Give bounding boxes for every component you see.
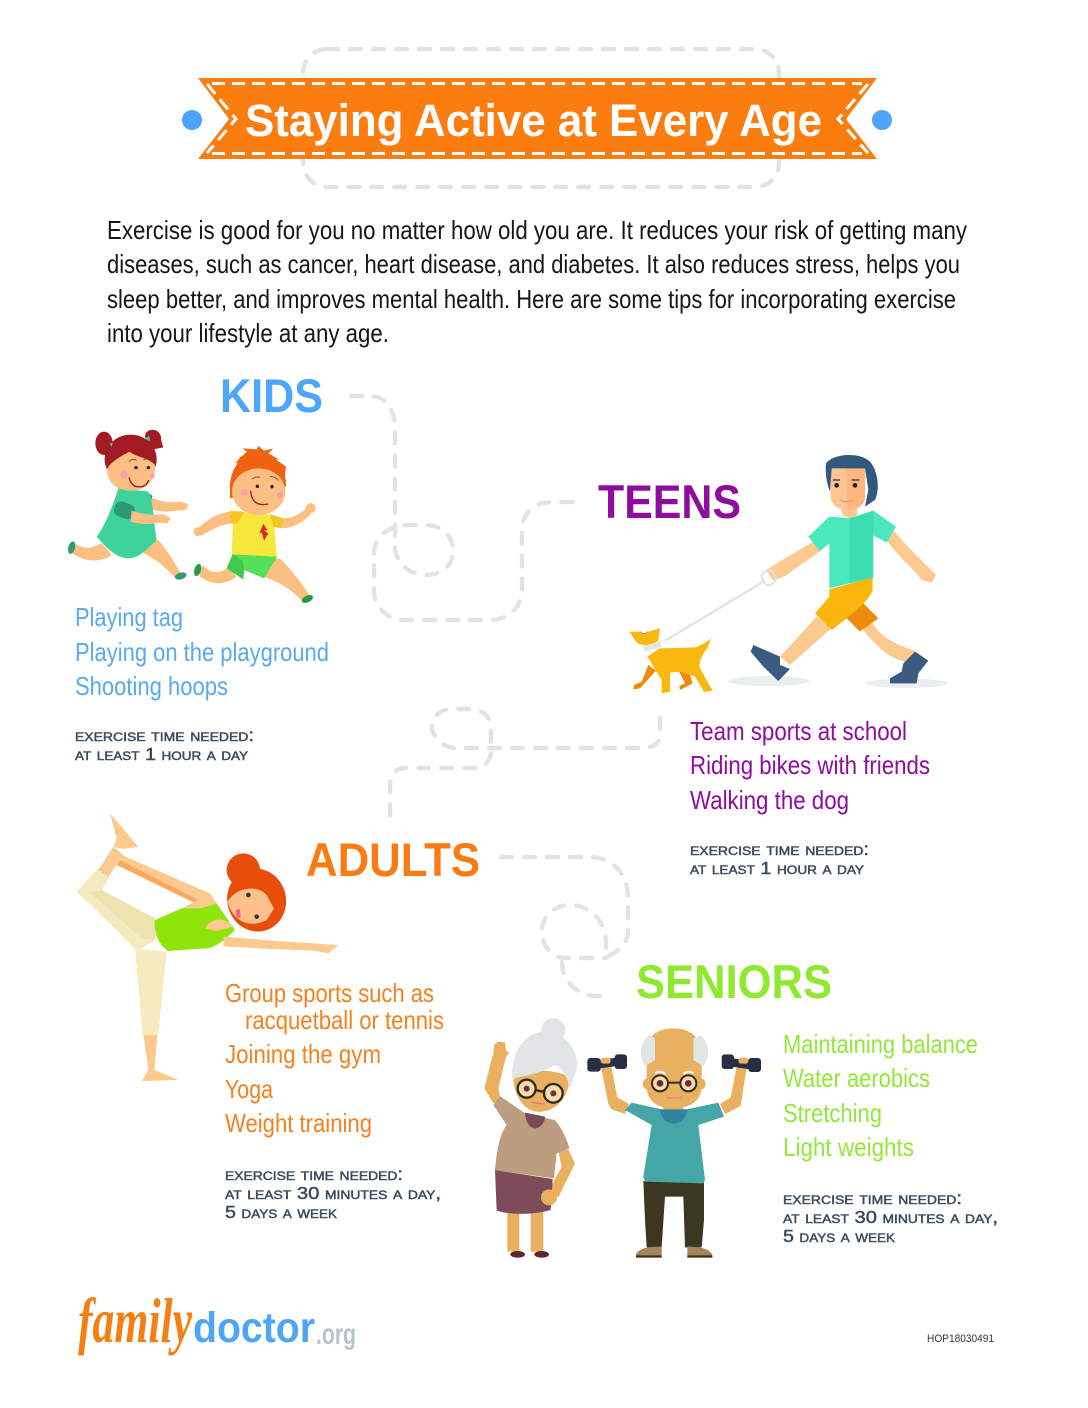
teens activities xyxy=(690,716,930,815)
logo: familydoctor.org: .org xyxy=(316,1318,356,1351)
senior man xyxy=(587,1028,761,1258)
illustration: running kids xyxy=(67,430,316,605)
teens activities: Walking the dog xyxy=(690,785,849,815)
teens activities: Riding bikes with friends xyxy=(690,750,930,780)
senior woman xyxy=(484,1018,577,1258)
intro paragraph xyxy=(107,215,967,348)
adults exercise time: 5 days a week xyxy=(225,1202,337,1222)
illustration: senior couple exercising xyxy=(484,1018,761,1258)
illustration: teen walking dog xyxy=(629,455,948,693)
kids activities: Shooting hoops xyxy=(75,671,228,701)
intro paragraph: into your lifestyle at any age. xyxy=(107,318,389,348)
intro paragraph: sleep better, and improves mental health. Here are some tips for incorporating exercise xyxy=(107,284,956,314)
adults activities xyxy=(225,978,444,1138)
teens activities: Team sports at school xyxy=(690,716,907,746)
seniors heading: SENIORS xyxy=(636,955,832,1008)
kids heading: KIDS xyxy=(220,369,323,422)
teen boy xyxy=(751,455,936,683)
dashed connector: teens to adults xyxy=(390,709,660,825)
boy xyxy=(193,446,316,605)
logo: familydoctor.org: doctor xyxy=(193,1304,315,1352)
illustration: woman in yoga pose xyxy=(77,813,338,1081)
title text: Staying Active at Every Age xyxy=(245,95,822,146)
seniors exercise time: 5 days a week xyxy=(783,1226,895,1246)
panel: teens xyxy=(598,455,948,878)
kids activities: Playing tag xyxy=(75,602,183,632)
dashed connector: kids to teens xyxy=(351,396,582,620)
kids exercise time: exercise time needed: xyxy=(75,725,254,745)
intro paragraph: Exercise is good for you no matter how old you are. It reduces your risk of getting many xyxy=(107,215,967,245)
panel: adults xyxy=(77,813,480,1222)
logo: familydoctor.org xyxy=(78,1285,356,1356)
adults exercise time: exercise time needed: xyxy=(225,1164,403,1184)
panel: kids xyxy=(67,369,329,764)
seniors exercise time: at least 30 minutes a day, xyxy=(783,1207,998,1227)
adults exercise time: at least 30 minutes a day, xyxy=(225,1183,441,1203)
logo: familydoctor.org: family xyxy=(78,1285,192,1356)
ground shadows xyxy=(728,676,948,688)
adults activities: Weight training xyxy=(225,1108,372,1138)
seniors activities: Maintaining balance xyxy=(783,1029,978,1059)
teens exercise time xyxy=(690,839,869,878)
girl xyxy=(67,430,188,581)
ribbon stitching xyxy=(207,84,868,154)
title banner xyxy=(182,78,892,159)
intro paragraph: diseases, such as cancer, heart disease, and diabetes. It also reduces stress, helps you xyxy=(107,249,960,279)
ribbon shape xyxy=(198,78,877,159)
adults activities: Group sports such as xyxy=(225,978,434,1008)
kids exercise time xyxy=(75,725,254,764)
banner dots xyxy=(182,110,892,130)
adults activities: racquetball or tennis xyxy=(245,1005,444,1035)
seniors activities: Stretching xyxy=(783,1098,882,1128)
seniors activities xyxy=(783,1029,978,1162)
seniors exercise time: exercise time needed: xyxy=(783,1188,962,1208)
dog xyxy=(629,628,713,693)
dashed connector: adults to seniors xyxy=(501,857,628,996)
teens heading: TEENS xyxy=(598,475,741,528)
panel: seniors xyxy=(484,955,998,1258)
document code: HOP18030491 xyxy=(927,1333,994,1345)
adults activities: Yoga xyxy=(225,1074,273,1104)
teens exercise time: exercise time needed: xyxy=(690,839,869,859)
adults heading: ADULTS xyxy=(306,833,480,886)
adults activities: Joining the gym xyxy=(225,1039,381,1069)
kids exercise time: at least 1 hour a day xyxy=(75,744,248,764)
seniors activities: Light weights xyxy=(783,1132,914,1162)
teens exercise time: at least 1 hour a day xyxy=(690,858,864,878)
kids activities xyxy=(75,602,329,701)
kids activities: Playing on the playground xyxy=(75,637,329,667)
dashed frame behind title xyxy=(303,49,779,187)
seniors exercise time xyxy=(783,1188,998,1246)
leash xyxy=(665,582,763,641)
seniors activities: Water aerobics xyxy=(783,1063,930,1093)
adults exercise time xyxy=(225,1164,441,1222)
